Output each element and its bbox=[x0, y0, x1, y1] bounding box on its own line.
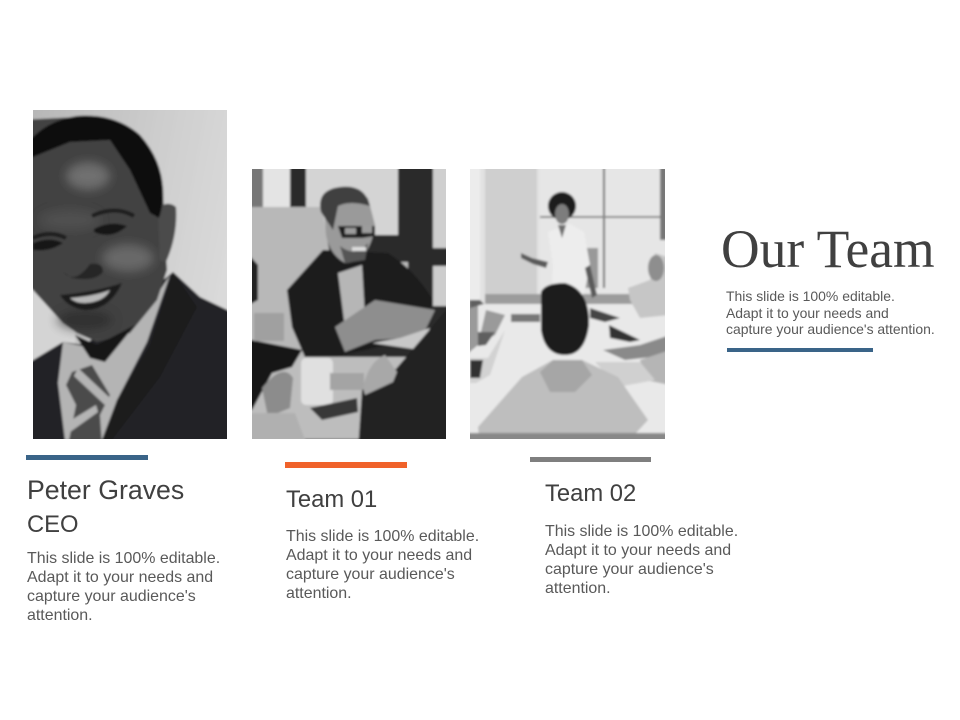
text: Team 01 description: This slide is 100% editable. bbox=[286, 528, 479, 545]
bar: Team 01 accent bbox=[285, 462, 407, 468]
photo: Peter Graves portrait bbox=[33, 110, 227, 439]
text: Team 02 description: Adapt it to your needs and bbox=[545, 542, 731, 559]
text: Team 02 description: This slide is 100% editable. bbox=[545, 523, 738, 540]
heading: Team 02: Team 02 bbox=[545, 480, 636, 507]
bar: intro accent bbox=[727, 348, 873, 352]
text: Team 02 description: capture your audience's bbox=[545, 561, 714, 578]
photo: Team 01 meeting bbox=[252, 169, 446, 439]
text: Team 02 description: attention. bbox=[545, 580, 611, 597]
text: Team 01 description bbox=[286, 528, 479, 602]
subheading: CEO: CEO bbox=[27, 511, 79, 538]
text: Peter Graves description bbox=[27, 550, 220, 624]
heading: Team 01: Team 01 bbox=[286, 486, 377, 513]
heading: Peter Graves: Peter Graves bbox=[27, 475, 184, 505]
text: intro description bbox=[726, 288, 935, 337]
text: Peter Graves description: Adapt it to your needs and bbox=[27, 569, 213, 586]
text: Peter Graves description: attention. bbox=[27, 607, 93, 624]
text: Team 01 description: capture your audience's bbox=[286, 566, 455, 583]
text: Peter Graves description: This slide is 100% editable. bbox=[27, 550, 220, 567]
photos bbox=[33, 110, 665, 439]
title: Our Team: Our Team bbox=[721, 219, 935, 279]
text: Team 02 description bbox=[545, 523, 738, 597]
text: Team 01 description: attention. bbox=[286, 585, 352, 602]
text: Team 01 description: Adapt it to your needs and bbox=[286, 547, 472, 564]
text: intro description: Adapt it to your needs and bbox=[726, 304, 889, 320]
text: Peter Graves description: capture your audience's bbox=[27, 588, 196, 605]
bar: Peter Graves accent bbox=[26, 455, 148, 460]
bar: Team 02 accent bbox=[530, 457, 651, 462]
text: intro description: capture your audience's attention. bbox=[726, 321, 935, 337]
photo: Team 02 presentation bbox=[470, 169, 665, 439]
text: intro description: This slide is 100% editable. bbox=[726, 288, 895, 304]
